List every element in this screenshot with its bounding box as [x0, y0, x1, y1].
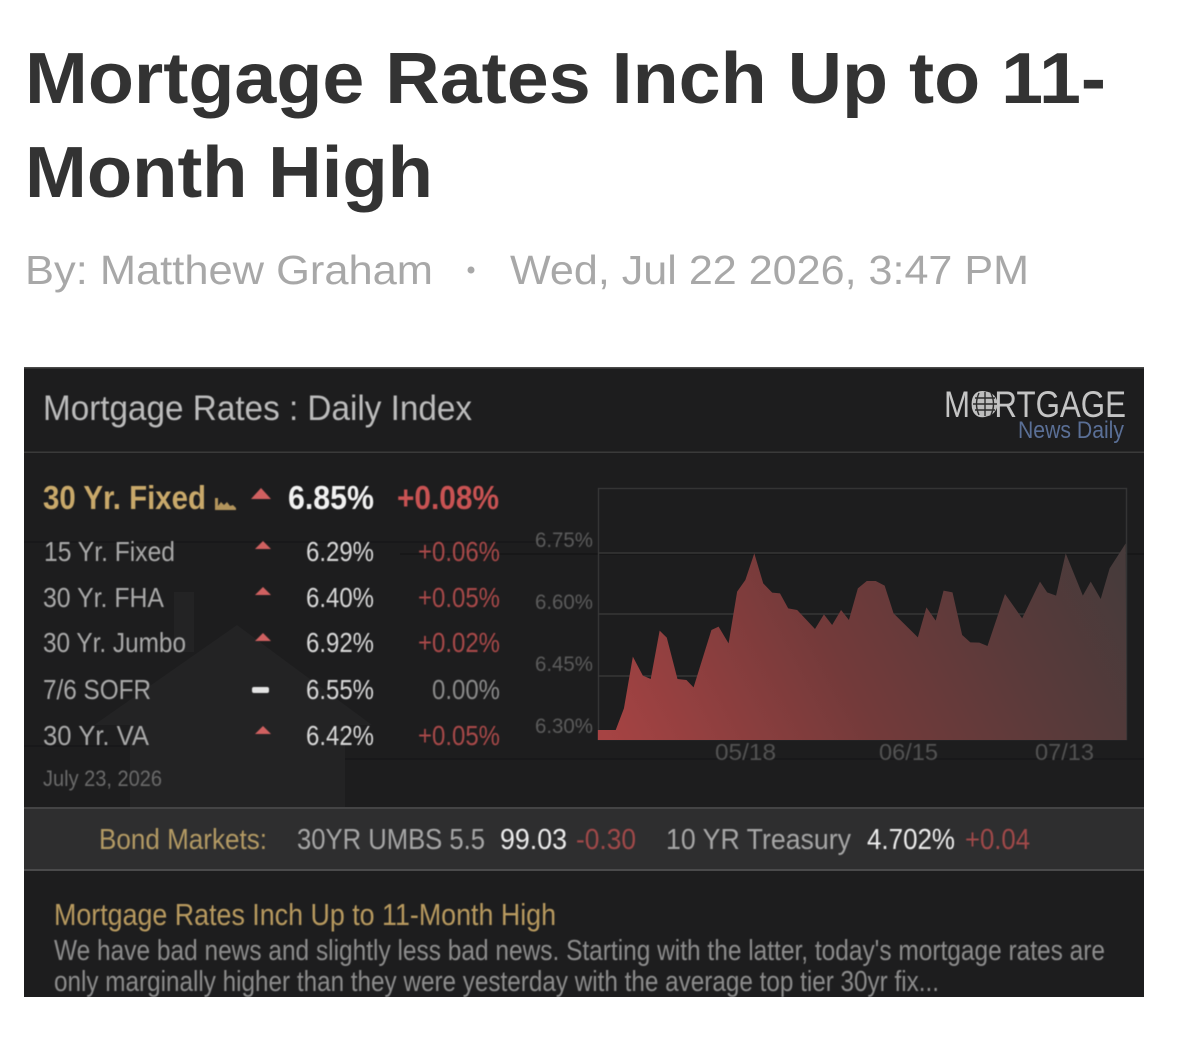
row: 7/6 SOFR: 6.55%	[306, 674, 374, 705]
row: 7/6 SOFR: 0.00%	[432, 674, 500, 705]
title: Mortgage Rates Inch Up to 11-	[25, 39, 1106, 119]
row: 30 Yr. Fixed: 30 Yr. Fixed	[43, 479, 206, 516]
title	[25, 39, 1106, 213]
x axis labels: 05/18	[715, 739, 776, 765]
chart area: rate history	[598, 543, 1126, 740]
row: 30 Yr. VA: 6.42%	[306, 720, 374, 751]
icon: small chart	[215, 498, 236, 510]
y axis labels: 6.30%	[535, 715, 593, 738]
bond markets band: -0.30	[576, 824, 636, 856]
news summary: only marginally higher than they were yesterday with the average top tier 30yr fix...	[54, 966, 939, 998]
area chart	[535, 488, 1126, 765]
row: 30 Yr. VA: +0.05%	[418, 720, 500, 751]
y axis labels	[535, 529, 593, 738]
x axis labels	[716, 742, 1094, 760]
row: 30 Yr. Fixed	[43, 484, 499, 511]
row: 7/6 SOFR	[44, 678, 500, 700]
row: 30 Yr. VA	[44, 725, 500, 746]
row: 15 Yr. Fixed: 15 Yr. Fixed	[44, 536, 175, 567]
widget heading: Mortgage Rates : Daily Index	[43, 389, 472, 428]
row: 15 Yr. Fixed: +0.06%	[418, 536, 500, 567]
date: July 23, 2026	[43, 766, 162, 791]
logo: News Daily	[1018, 417, 1124, 444]
bond markets band: 4.702%	[867, 824, 955, 856]
y axis labels: 6.60%	[535, 591, 593, 614]
row: 30 Yr. Jumbo: 30 Yr. Jumbo	[43, 627, 186, 658]
bond markets band	[24, 807, 1144, 871]
bond markets band: 99.03	[500, 824, 567, 856]
title: Month High	[25, 133, 433, 213]
row: 30 Yr. Fixed: 6.85%	[288, 479, 374, 516]
row: 30 Yr. FHA	[43, 586, 500, 608]
up arrow	[251, 488, 271, 499]
news headline: Mortgage Rates Inch Up to 11-Month High	[54, 897, 556, 932]
bond markets band: +0.04	[965, 824, 1030, 856]
row: 30 Yr. Jumbo	[43, 631, 500, 653]
bond markets band: 30YR UMBS 5.5	[297, 824, 485, 856]
row: 7/6 SOFR: 7/6 SOFR	[43, 674, 151, 705]
byline	[25, 247, 1029, 293]
row: 15 Yr. Fixed: 6.29%	[306, 536, 374, 567]
byline: Wed, Jul 22 2026, 3:47 PM	[510, 247, 1029, 293]
y axis labels: 6.75%	[535, 529, 593, 552]
news summary	[54, 935, 1105, 998]
row: 30 Yr. FHA: 30 Yr. FHA	[43, 582, 164, 613]
y axis labels: 6.45%	[535, 653, 593, 676]
logo: MORTGAGE	[944, 384, 1126, 425]
x axis labels: 07/13	[1035, 739, 1094, 765]
byline: By: Matthew Graham	[25, 247, 433, 293]
rates table	[43, 479, 500, 791]
bond markets band: 10 YR Treasury	[666, 824, 851, 856]
row: 30 Yr. Jumbo: +0.02%	[418, 627, 500, 658]
row: 30 Yr. Jumbo: 6.92%	[306, 627, 374, 658]
row: 30 Yr. FHA: 6.40%	[306, 582, 374, 613]
row: 15 Yr. Fixed	[45, 540, 500, 562]
panel: mortgage rates widget	[24, 367, 1144, 998]
widget header	[24, 391, 1144, 453]
logo	[946, 391, 1125, 443]
row: 30 Yr. Fixed: +0.08%	[397, 479, 499, 516]
row: 30 Yr. FHA: +0.05%	[418, 582, 500, 613]
icon: globe	[972, 392, 998, 416]
news teaser	[54, 897, 1105, 998]
bond markets band: Bond Markets:	[99, 824, 267, 856]
row: 30 Yr. VA: 30 Yr. VA	[43, 720, 149, 751]
x axis labels: 06/15	[879, 739, 938, 765]
house watermark	[130, 745, 345, 760]
